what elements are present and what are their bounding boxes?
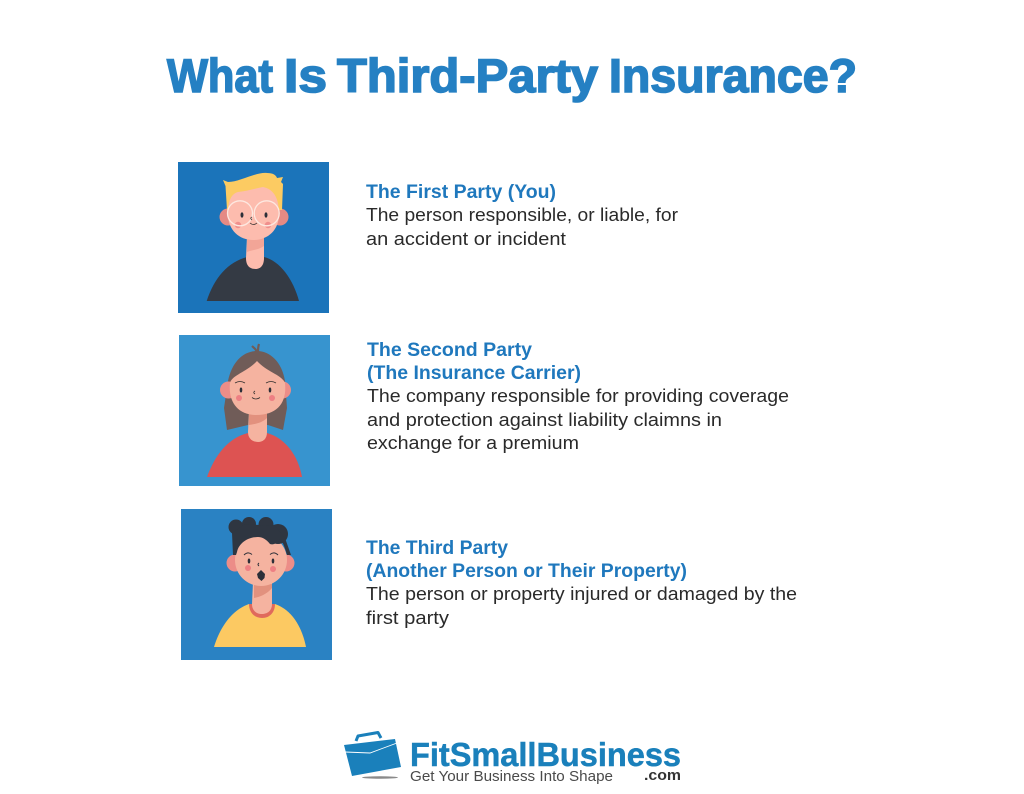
ears — [220, 208, 288, 226]
goatee — [257, 570, 265, 581]
panel: second party — [179, 335, 789, 486]
hair — [228, 517, 291, 555]
neck — [246, 236, 264, 269]
text: second party: The company responsible for providing coverage — [367, 386, 789, 406]
panel: first party — [178, 162, 678, 313]
eyes and brows — [248, 558, 274, 564]
ears — [226, 554, 294, 572]
title — [167, 49, 857, 102]
text: second party: exchange for a premium — [367, 433, 579, 453]
title: Insurance? — [609, 49, 857, 102]
hair tuft — [252, 344, 259, 352]
head — [228, 187, 279, 240]
title: Third-Party — [337, 49, 598, 102]
text: third party — [366, 538, 797, 628]
title: What — [167, 49, 273, 102]
avatar: second party — [179, 335, 330, 486]
neck — [252, 582, 272, 614]
ears — [220, 382, 291, 398]
body: dark shirt — [207, 257, 299, 301]
text: second party — [367, 340, 789, 453]
text: third party: The person or property injured or damaged by the — [366, 584, 797, 604]
eyes — [240, 212, 268, 218]
hair — [223, 173, 283, 210]
body: red shirt — [207, 433, 302, 477]
head — [235, 534, 287, 586]
collar — [249, 604, 275, 618]
head — [230, 361, 285, 415]
cheeks — [236, 395, 275, 401]
tagline: Get Your Business Into Shape — [410, 769, 613, 785]
text: second party: The Second Party — [367, 340, 532, 361]
text: second party: (The Insurance Carrier) — [367, 363, 581, 384]
hair back — [224, 351, 287, 430]
domain: .com — [644, 767, 681, 784]
avatar: first party — [178, 162, 329, 313]
text: third party: The Third Party — [366, 538, 508, 559]
neck — [248, 410, 267, 442]
title: Is — [284, 49, 327, 102]
text: first party — [366, 182, 678, 249]
text: first party: The First Party (You) — [366, 182, 556, 203]
logo: Fit Small Business — [344, 732, 681, 785]
icon: briefcase — [344, 732, 401, 779]
text: third party: first party — [366, 608, 449, 628]
wordmark: FitSmallBusiness — [410, 736, 681, 773]
glasses — [228, 201, 279, 226]
text: third party: (Another Person or Their Property) — [366, 561, 687, 582]
text: first party: The person responsible, or liable, for — [366, 205, 678, 225]
text: second party: and protection against liability claimns in — [367, 410, 722, 430]
cheeks — [245, 565, 276, 572]
body: yellow shirt — [214, 604, 306, 647]
text: first party: an accident or incident — [366, 229, 566, 249]
mouth and nose — [250, 217, 257, 224]
cheeks — [235, 222, 271, 228]
panel: third party — [181, 509, 797, 660]
eyes and brows — [240, 388, 271, 392]
avatar: third party — [181, 509, 332, 660]
